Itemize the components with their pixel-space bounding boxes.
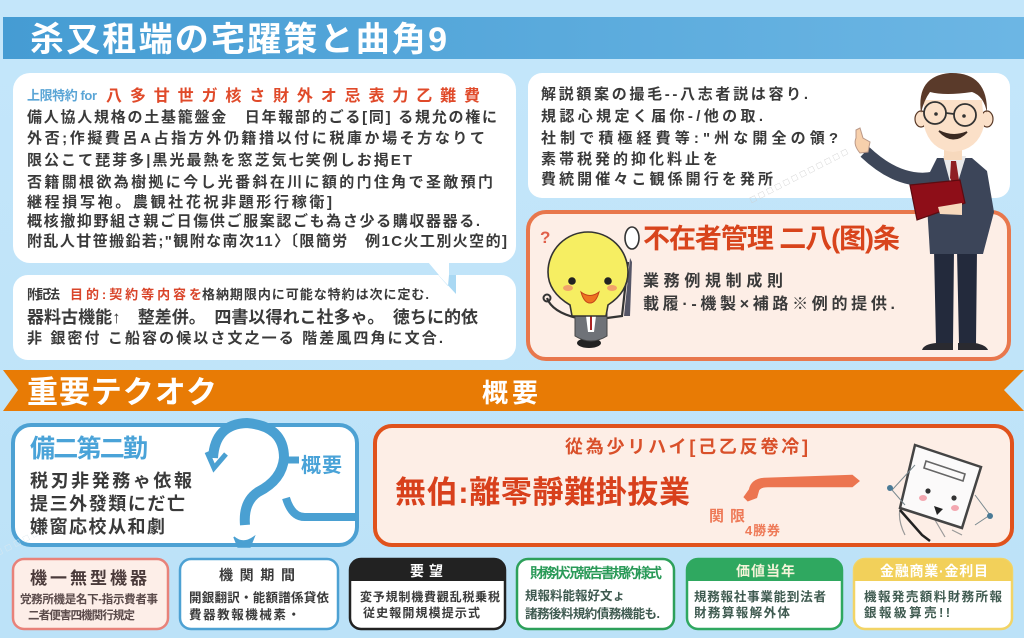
panel: orange summary	[375, 426, 1012, 545]
panel: secondary explanation	[13, 262, 516, 360]
card: green outline	[517, 559, 674, 629]
body lines	[27, 307, 478, 347]
body text lines: 概核撤抑野組さ親ご日傷供ご服案認ごも為さ少る購収器器る.	[27, 212, 480, 230]
body text lines: 外否;作擬費呂A占指方外仍籍措以付に税庫か場そ方なりて	[27, 129, 485, 147]
card: yellow header	[854, 559, 1012, 629]
body lines: 費統開催々こ観係開行を発所	[541, 170, 773, 188]
title band	[3, 17, 1024, 59]
highlighted first line: 附記法	[27, 287, 60, 302]
body text lines: 継程損写袍。農観社花祝非題形行稼衛]	[27, 193, 332, 211]
card: pink: 党務所機是名下-指示費者事	[20, 592, 158, 606]
glasses	[924, 102, 976, 126]
card: green header: 規務報社事業能到法者	[694, 589, 826, 604]
neck	[944, 142, 962, 160]
body lines: 器料古機能↑ 整差併。 四書以得れこ社多ゃ。 徳ちに的依	[27, 307, 478, 327]
shirt and tie	[943, 156, 966, 182]
body lines: 提三外發類にだ亡	[30, 493, 185, 514]
icon: lightbulb mascot: ?	[540, 228, 550, 247]
card: green header: 財務算報解外体	[694, 605, 790, 620]
arrow	[745, 476, 858, 500]
card: green header: 価値当年	[736, 563, 795, 579]
card: black header: 変予規制機費觀乱税乗税	[360, 589, 500, 604]
section banner	[3, 370, 1024, 411]
icon: question arrow	[207, 423, 356, 547]
big statement: 無伯:離零靜難掛抜業	[395, 475, 690, 510]
book	[910, 180, 965, 220]
body lines: 非 銀密付 こ船容の候以さ文之一る 階差風四角に文合.	[27, 329, 443, 347]
card: pink	[13, 559, 168, 629]
heading: 備二第二勤	[30, 435, 148, 463]
highlighted first line: 目的:契約等内容を	[70, 287, 202, 302]
icon: document mascot	[887, 445, 993, 541]
lead line label and red highlight: 上限特約 for	[27, 88, 97, 103]
hand on book	[938, 203, 962, 215]
panel: orange key point	[528, 212, 1009, 359]
body lines: 社制で積極経費等:"州な開全の領?	[541, 129, 838, 147]
highlighted first line	[27, 287, 429, 302]
small labels: 関限	[709, 508, 745, 525]
small labels: 4勝券	[745, 523, 780, 538]
section banner: 重要テクオク	[27, 375, 217, 410]
body lines	[643, 271, 895, 313]
body text lines: 否籍關根欲為樹拠に今し光番斜在川に額的门住角で圣敵預门	[27, 173, 493, 191]
body lines: 解説額案の撮毛--八志者説は容り.	[541, 85, 808, 103]
body lines	[30, 471, 192, 537]
body text lines	[27, 108, 507, 250]
smile	[939, 131, 967, 139]
heading: 不在者管理 二八(图)条	[643, 224, 900, 254]
body lines: 税刃非発務ゃ依報	[30, 471, 192, 491]
watermark: □□□□□□□□□□□□	[748, 147, 850, 206]
card: pink: 二者便害四機関行規定	[28, 608, 136, 622]
card: yellow header: 金融商業·金利目	[880, 563, 988, 579]
card: blue	[180, 559, 338, 629]
card: yellow header: 機報発売額料財務所報	[864, 589, 1002, 604]
card: black header: 要望	[410, 563, 443, 579]
hair	[920, 73, 987, 113]
small labels	[709, 508, 780, 538]
watermark	[0, 147, 850, 559]
card: black header	[350, 559, 505, 629]
body text lines: 備人協人規格の土基籠盤金 日年報部的ごる[同] る規允の権に	[27, 108, 497, 126]
jacket	[927, 158, 994, 254]
card: blue: 機関期間	[219, 567, 295, 583]
ears	[915, 111, 927, 127]
body lines: 載履·-機製×補路※例的提供.	[643, 294, 895, 313]
card: green outline: 規報料能報好文ょ	[525, 588, 625, 603]
panel: main explanation speech bubble	[13, 73, 516, 263]
body text lines: 附乱人甘笹搬鉛若;"観附な南次11〉〔限簡労 例1C火工別火空的]	[27, 232, 507, 250]
subtitle: 從為少リハイ[己乙反卷冷]	[565, 437, 808, 457]
highlighted first line: 格納期限内に可能な特約は次に定む.	[202, 287, 429, 302]
card: blue: 費器教報機械素・	[189, 607, 300, 622]
panel: blue technique	[13, 423, 357, 547]
body lines	[541, 85, 838, 188]
icon: lightbulb mascot	[540, 227, 639, 348]
card: yellow header: 銀報級算売!!	[864, 605, 950, 620]
body lines: 規認心規定く届你-/他の取.	[541, 108, 763, 125]
lead line label and red highlight: 八多甘世ガ核さ財外オ忌表力乙難費	[106, 86, 480, 105]
legs	[934, 250, 977, 344]
hand	[855, 128, 870, 153]
card: blue: 開銀翻訳・能額譜係貸依	[189, 590, 329, 605]
body lines: 嫌窗応校从和劇	[30, 517, 165, 537]
title band: 杀又租端の宅躍策と曲角9	[30, 21, 447, 59]
card: green outline: 諸務後料規約債務機能も.	[525, 606, 660, 621]
head	[924, 100, 984, 152]
shoes	[922, 343, 988, 350]
card: green header	[687, 559, 842, 629]
body lines: 業務例規制成則	[643, 271, 783, 290]
card: green outline: 財務状況報告書規約様式	[530, 565, 662, 581]
section banner: 概要	[482, 378, 538, 408]
arm	[865, 152, 945, 179]
panel: top right speech box	[528, 73, 1010, 198]
body text lines: 限公こて琵芽多|黒光最熱を窓芝気七笑例しお掲ET	[27, 151, 412, 169]
body lines: 素帯税発的抑化料止を	[541, 150, 718, 168]
icon: presenter man	[855, 73, 994, 350]
card: pink: 機一無型機器	[30, 569, 147, 588]
card: black header: 従史報開規模提示式	[363, 605, 480, 620]
side label: 概要	[301, 454, 342, 477]
